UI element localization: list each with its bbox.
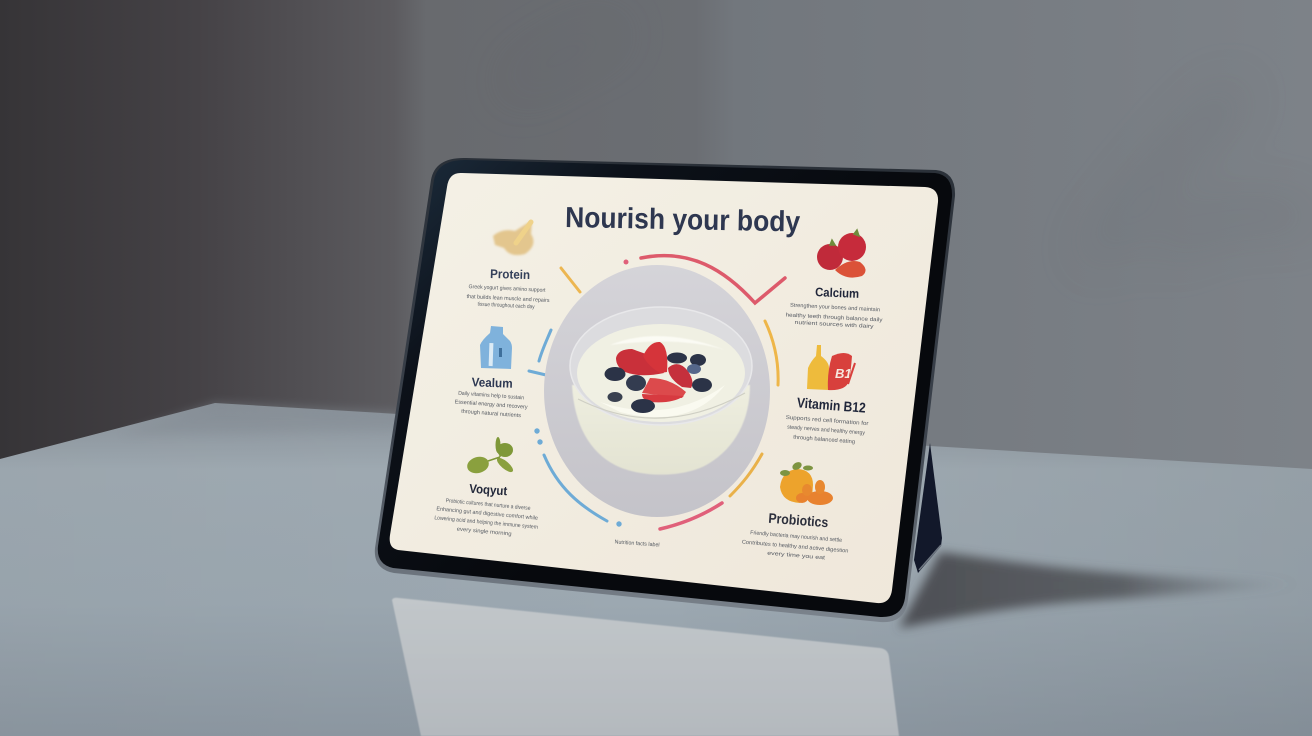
icon: orange fruit bbox=[780, 460, 833, 505]
icon: leaves bbox=[465, 437, 515, 476]
tablet stand bbox=[914, 443, 942, 573]
text block: protein: tissue throughout each day bbox=[477, 302, 535, 310]
text block: vealum bbox=[454, 391, 528, 419]
text block: calcium: Strengthen your bones and maintain bbox=[790, 303, 880, 313]
panel: calcium bbox=[785, 230, 883, 330]
text block: voqyut bbox=[434, 498, 539, 538]
text block: vitamin b12: through balanced eating bbox=[793, 435, 855, 445]
text block: voqyut: every single morning bbox=[456, 526, 512, 538]
icon: berries bbox=[817, 230, 866, 278]
text block: probiotics: every time you eat bbox=[767, 551, 826, 561]
text block: vitamin b12: steady nerves and healthy energy bbox=[787, 425, 865, 437]
panel: vealum bbox=[454, 326, 528, 419]
text block: vealum: Essential energy and recovery bbox=[454, 399, 528, 411]
blueberries bbox=[604, 352, 712, 413]
text block: calcium: healthy teeth through balance daily bbox=[785, 312, 883, 324]
tablet cast shadow bbox=[900, 552, 1300, 628]
central grey disc bbox=[544, 265, 770, 517]
text block: vitamin b12: Supports red cell formation for bbox=[785, 415, 869, 427]
panel: voqyut bbox=[434, 437, 539, 538]
text block: vitamin b12 bbox=[785, 415, 869, 445]
text block: probiotics bbox=[742, 530, 849, 561]
tablet body bbox=[375, 158, 955, 622]
icon: vitamin bottle and card: B1 bbox=[835, 366, 852, 381]
circular progress ring bbox=[529, 256, 785, 529]
text block: vealum: Daily vitamins help to sustain bbox=[458, 391, 524, 401]
label: vealum: Vealum bbox=[471, 375, 513, 391]
marble table bbox=[0, 400, 1312, 736]
panel: protein bbox=[466, 221, 550, 310]
tablet screen bbox=[390, 173, 938, 603]
text block: probiotics: Contributes to healthy and active digestion bbox=[742, 540, 849, 554]
title: Nourish your body bbox=[565, 202, 800, 239]
strawberries bbox=[616, 342, 692, 402]
panel: probiotics bbox=[742, 460, 849, 561]
label: calcium: Calcium bbox=[815, 285, 859, 301]
panel: vitamin b12 bbox=[785, 345, 869, 445]
label: vitamin b12: Vitamin B12 bbox=[796, 394, 867, 416]
text block: calcium: nutrient sources with dairy bbox=[794, 320, 874, 330]
tablet reflection on table bbox=[392, 598, 899, 736]
text block: voqyut: Probiotic cultures that nurture a diverse bbox=[445, 498, 531, 512]
label: probiotics: Probiotics bbox=[768, 510, 829, 530]
text block: calcium bbox=[785, 303, 883, 330]
footnote: Nutrition facts label bbox=[614, 539, 660, 549]
background wall bbox=[0, 0, 1312, 480]
text block: voqyut: Lowering acid and helping the immune system bbox=[434, 515, 539, 531]
label: protein: Protein bbox=[490, 267, 530, 282]
text block: protein bbox=[466, 284, 550, 310]
yogurt bowl bbox=[570, 307, 752, 475]
text block: protein: that builds lean muscle and repairs bbox=[466, 294, 550, 304]
text block: voqyut: Enhancing gut and digestive comfort while bbox=[436, 506, 538, 522]
text block: probiotics: Friendly bacteria may nourish and settle bbox=[750, 530, 842, 544]
label: voqyut: Voqyut bbox=[469, 482, 508, 498]
icon: bottle bbox=[480, 326, 512, 369]
icon: protein bbox=[493, 221, 533, 255]
text block: protein: Greek yogurt gives amino support bbox=[468, 284, 546, 294]
text block: vealum: through natural nutrients bbox=[461, 409, 521, 419]
